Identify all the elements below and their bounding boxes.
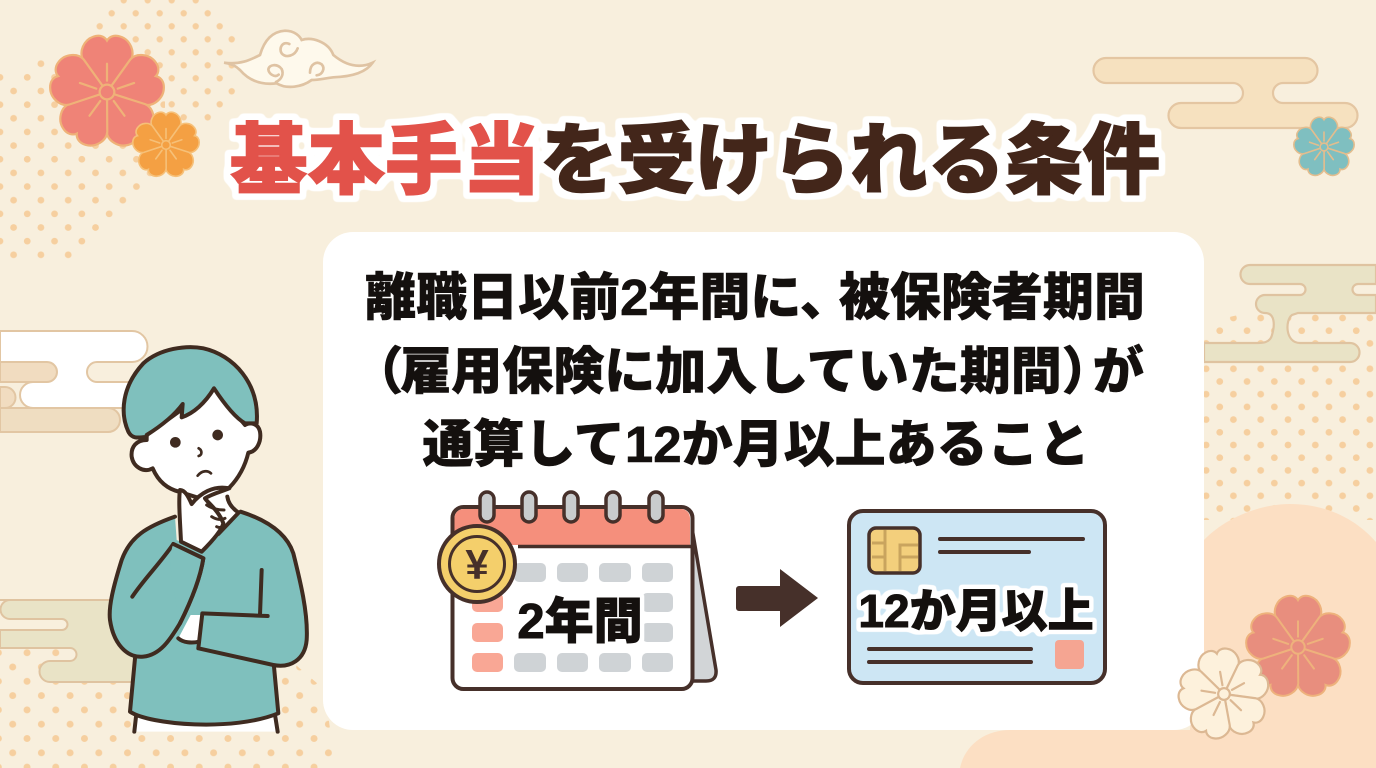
- condition text: [352, 269, 1145, 473]
- calendar back sheet: [690, 528, 716, 681]
- icon: yen coin: ¥: [465, 541, 489, 588]
- main white panel: [323, 232, 1204, 730]
- condition text: 離職日以前2年間に、被保険者期間: [365, 269, 1145, 326]
- title: 基本手当を受けられる条件: [230, 118, 1160, 204]
- shirt hem: [135, 713, 278, 732]
- calendar rings: [480, 492, 663, 522]
- cloud: left lower: [0, 600, 135, 682]
- cloud: top right: [1094, 58, 1358, 128]
- calendar label: 2年間: [517, 595, 643, 649]
- hair: [124, 347, 257, 438]
- dot pattern: bottom left: [0, 648, 335, 768]
- condition text: （雇用保険に加入していた期間）が: [352, 343, 1144, 400]
- calendar date cells: [472, 563, 673, 672]
- calendar sheet: [452, 507, 692, 689]
- card stamp: [1055, 640, 1084, 669]
- cloud: top centre: [224, 31, 373, 87]
- condition text: 通算して12か月以上あること: [422, 416, 1090, 473]
- sweater fill: [110, 512, 307, 725]
- character: thinking person: [110, 347, 307, 732]
- icon: card: [849, 511, 1105, 683]
- right sleeve: [198, 512, 307, 666]
- cloud: left upper: [0, 331, 148, 432]
- flower: bottom coral: [1242, 596, 1354, 702]
- dot pattern: top left: [0, 0, 240, 262]
- flower: teal: [1291, 117, 1357, 179]
- peach blob: bottom right: [960, 504, 1376, 768]
- raised hand: [179, 488, 229, 552]
- dot pattern: right: [1204, 310, 1376, 520]
- wrist: [178, 615, 202, 643]
- card lines: [869, 539, 1083, 662]
- card chip: [869, 528, 920, 573]
- flower: large coral: [46, 36, 168, 152]
- face and ears: [132, 387, 260, 498]
- flower: orange: [130, 112, 202, 180]
- left sleeve: [110, 517, 203, 657]
- icon: calendar: [439, 492, 716, 689]
- cloud: right middle: [1204, 265, 1376, 362]
- icon: yen coin: [439, 526, 515, 602]
- flower: cream: [1168, 641, 1281, 750]
- card label: 12か月以上: [858, 585, 1094, 637]
- torso outline: [130, 658, 278, 725]
- face details: [170, 430, 223, 476]
- calendar header: [454, 509, 690, 545]
- neck: [200, 487, 239, 537]
- arrow: [736, 569, 818, 627]
